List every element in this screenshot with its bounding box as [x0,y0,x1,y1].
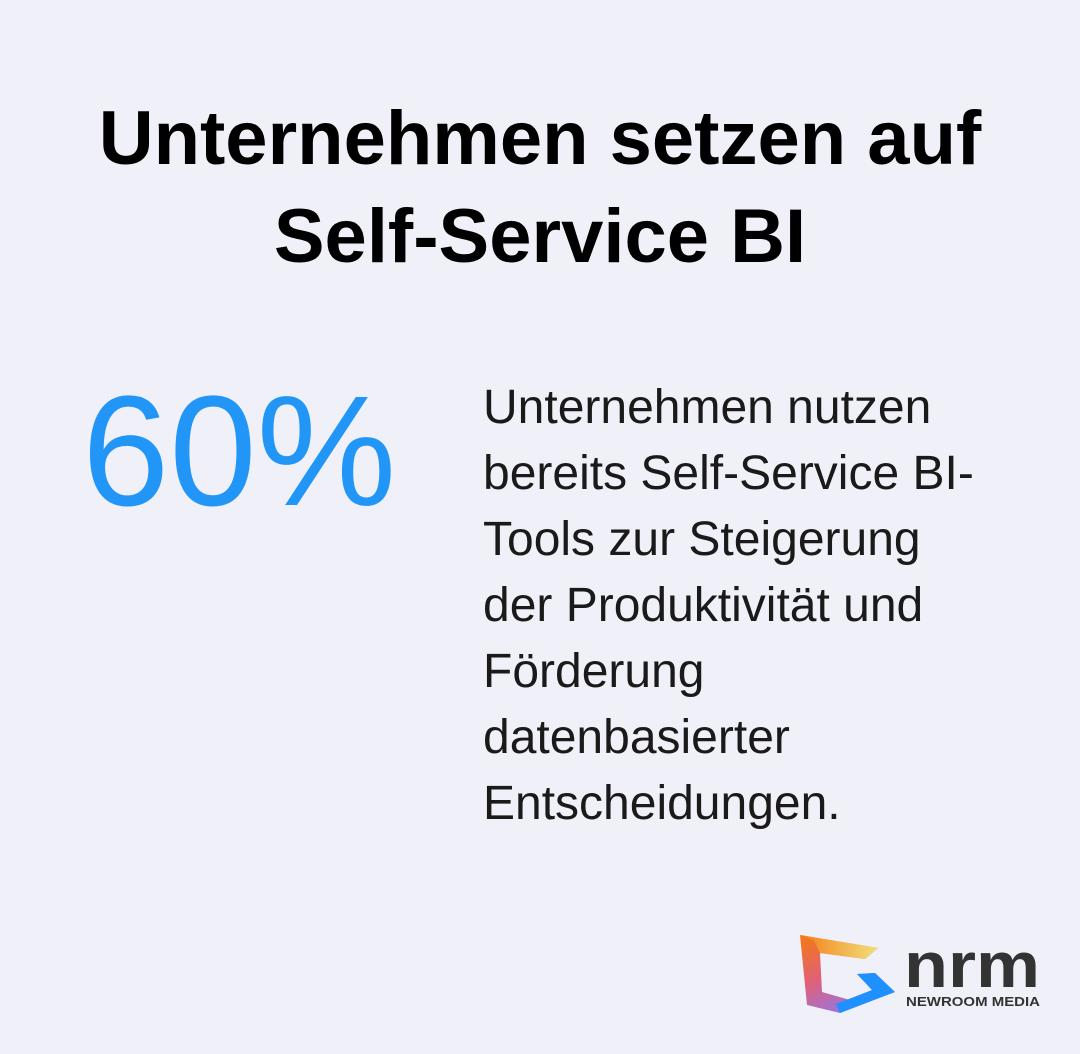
logo: nrm newroom media [800,932,1041,1013]
description text: Tools zur Steigerung [483,513,921,566]
title: Self-Service BI [274,194,806,279]
description text: bereits Self-Service BI- [483,447,974,500]
title [99,96,982,279]
description text: Förderung [483,645,704,698]
big stat: 60% [82,364,396,539]
description text: Unternehmen nutzen [483,381,931,434]
title: Unternehmen setzen auf [99,96,981,181]
description text: der Produktivität und [483,579,923,632]
description text: Entscheidungen. [483,777,841,830]
description text: datenbasierter [483,711,790,764]
logo: nrm newroom media: NEWROOM MEDIA [906,994,1041,1009]
description text [483,381,974,830]
